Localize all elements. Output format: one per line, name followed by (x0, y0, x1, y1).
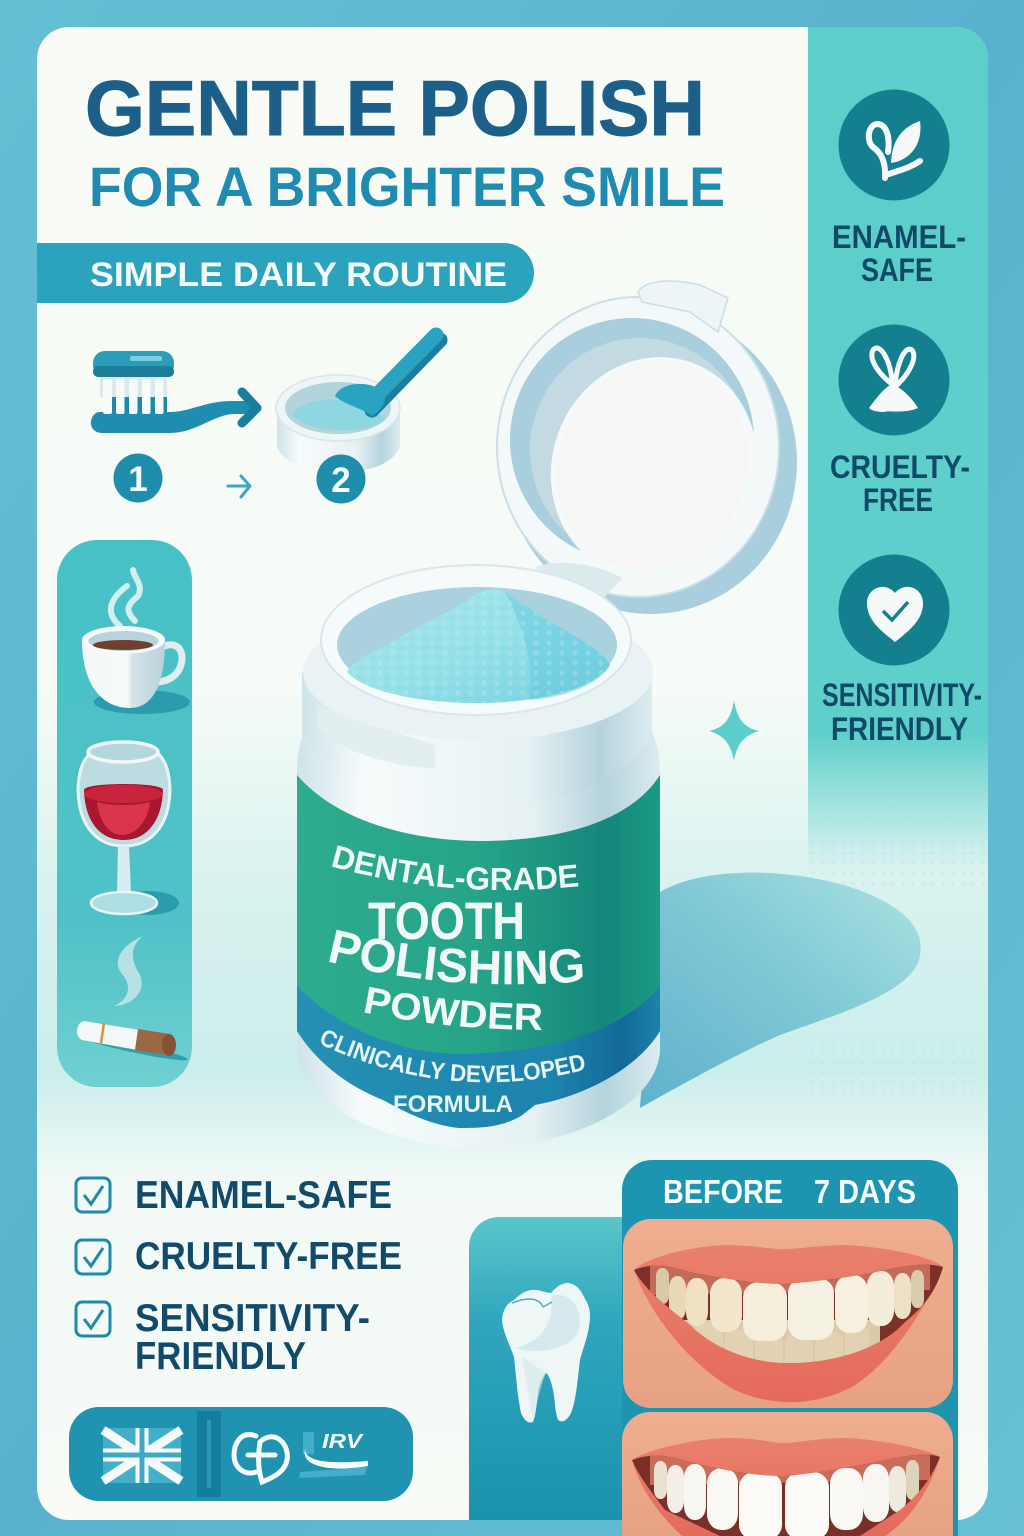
powder (347, 589, 610, 703)
step 1: toothbrush with arrow (91, 351, 257, 433)
icon: tooth polishing powder jar: TOOTH (368, 892, 525, 951)
label text (330, 866, 582, 890)
logo mark: IRV: IRV (322, 1431, 364, 1453)
claim: sensitivity-friendly: FRIENDLY (831, 711, 968, 747)
heading ribbon: simple daily routine (37, 243, 534, 303)
claim: cruelty-free: CRUELTY- (830, 449, 970, 485)
jar shoulder and rim (303, 604, 653, 740)
check: sensitivity-friendly: SENSITIVITY- (135, 1297, 370, 1340)
icon: tooth polishing powder jar: CLINICALLY DEVELOPED (321, 1030, 584, 1082)
panel: before and after comparison: 7 DAYS (814, 1173, 916, 1210)
certification badge (69, 1407, 413, 1501)
icon: coffee cup (82, 570, 190, 714)
title: FOR A BRIGHTER SMILE (89, 155, 725, 218)
step number 1: 1 (128, 460, 148, 499)
sparkle (709, 700, 759, 761)
photo: after smile (622, 1412, 953, 1536)
icon: tooth polishing powder jar: FORMULA (393, 1091, 513, 1118)
title: GENTLE POLISH (85, 64, 705, 152)
step number 1 (114, 454, 162, 502)
panel: before and after comparison (622, 1160, 958, 1536)
icon: tooth polishing powder jar: POWDER (364, 986, 542, 1030)
heading ribbon: simple daily routine: SIMPLE DAILY ROUTINE (90, 256, 507, 294)
jar opening (337, 587, 617, 703)
icon: tooth polishing powder jar (297, 564, 660, 1146)
step number 2: 2 (331, 461, 351, 500)
photo: before smile (623, 1219, 953, 1408)
claim: cruelty-free (830, 324, 970, 518)
icon: cigarette with smoke (77, 936, 189, 1064)
claim: sensitivity-friendly: SENSITIVITY- (822, 677, 982, 713)
jar label band (297, 975, 660, 1128)
check: enamel-safe: ENAMEL-SAFE (135, 1174, 392, 1217)
jar ground shadow (640, 873, 921, 1108)
icon: glass of red wine (78, 742, 179, 915)
step arrow (228, 476, 250, 497)
claim: sensitivity-friendly (822, 554, 982, 747)
benefits checklist (76, 1174, 402, 1378)
icon: union flag (103, 1428, 181, 1483)
claim: enamel-safe (832, 90, 966, 288)
jar collar (302, 672, 652, 807)
claim: cruelty-free: FREE (863, 482, 933, 518)
claim: enamel-safe: SAFE (861, 252, 933, 288)
icon: tooth polishing powder jar: POLISHING (329, 930, 583, 984)
title (85, 64, 725, 218)
step number 2 (316, 454, 366, 504)
check: sensitivity-friendly (76, 1297, 370, 1378)
step 2: bowl of powder with spoon (276, 335, 440, 473)
check: sensitivity-friendly: FRIENDLY (135, 1335, 306, 1378)
panel: right claims strip (808, 27, 988, 1100)
jar body (297, 732, 660, 1148)
jar label: green wrap (297, 775, 660, 1054)
logo mark: IRV (299, 1431, 368, 1478)
icon: logo mark (234, 1435, 287, 1482)
panel: tooth illustration (469, 1217, 622, 1520)
panel: staining culprits (57, 540, 192, 1087)
check: cruelty-free: CRUELTY-FREE (135, 1235, 402, 1278)
claim: enamel-safe: ENAMEL- (832, 219, 966, 255)
icon: tooth polishing powder jar: DENTAL-GRADE (332, 845, 578, 890)
icon: tooth (502, 1283, 590, 1423)
icon: open jar lid (497, 281, 797, 614)
panel: before and after comparison: BEFORE (663, 1173, 783, 1210)
